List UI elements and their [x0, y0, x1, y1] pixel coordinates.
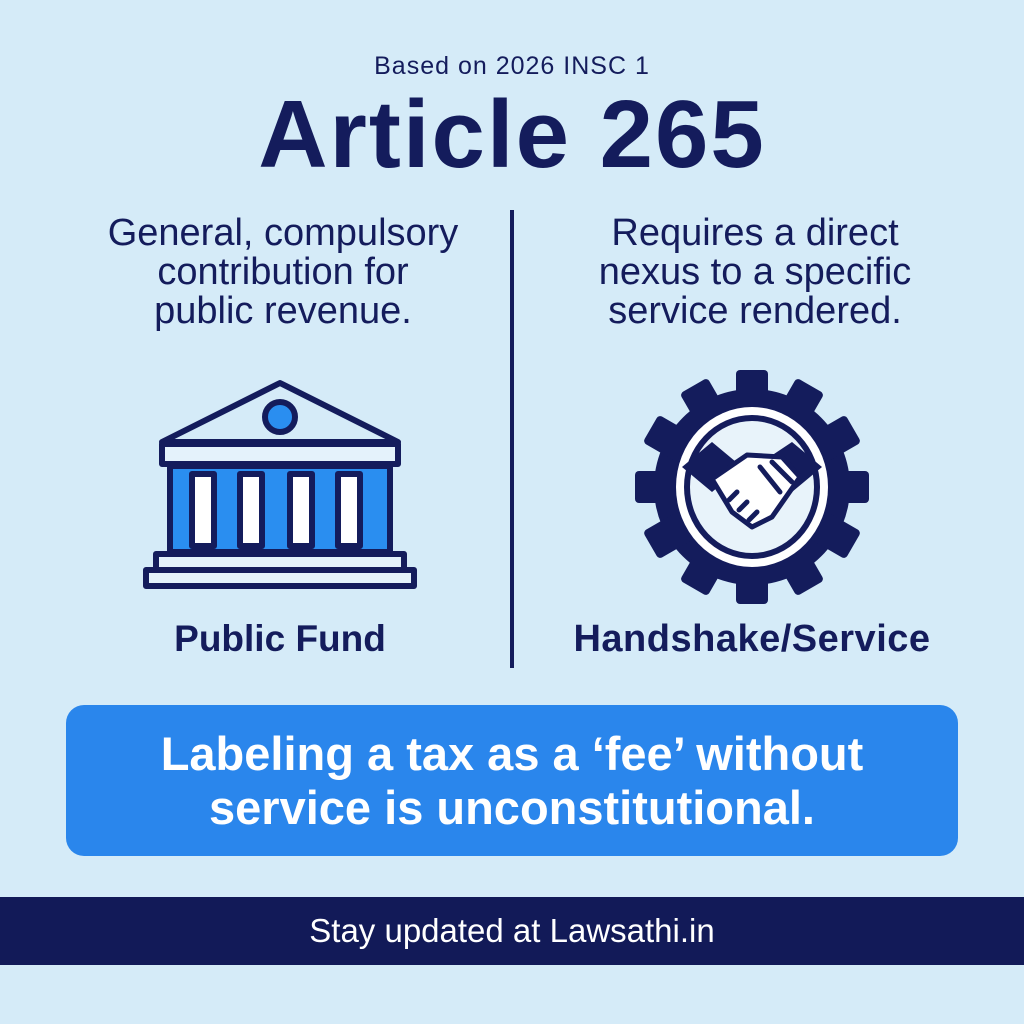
subtitle: Based on 2026 INSC 1	[374, 52, 650, 80]
callout	[66, 705, 958, 856]
footer: Stay updated at Lawsathi.in	[309, 912, 715, 949]
icon: gear handshake	[635, 370, 869, 604]
label: handshake service: Handshake/Service	[573, 618, 931, 660]
footer	[0, 897, 1024, 965]
divider	[510, 210, 514, 668]
icon: building	[143, 380, 417, 589]
text: fee definition: service rendered.	[608, 290, 902, 332]
text: tax definition	[108, 212, 458, 332]
label: public fund: Public Fund	[174, 618, 386, 659]
text: tax definition: public revenue.	[154, 290, 412, 332]
callout: Labeling a tax as a ‘fee’ without	[161, 727, 863, 780]
text: tax definition: General, compulsory	[108, 212, 458, 254]
text: fee definition: Requires a direct	[611, 212, 899, 254]
text: fee definition: nexus to a specific	[599, 251, 911, 293]
title: Article 265	[258, 81, 766, 188]
text: fee definition	[599, 212, 911, 332]
callout: service is unconstitutional.	[209, 781, 815, 834]
text: tax definition: contribution for	[157, 251, 409, 293]
